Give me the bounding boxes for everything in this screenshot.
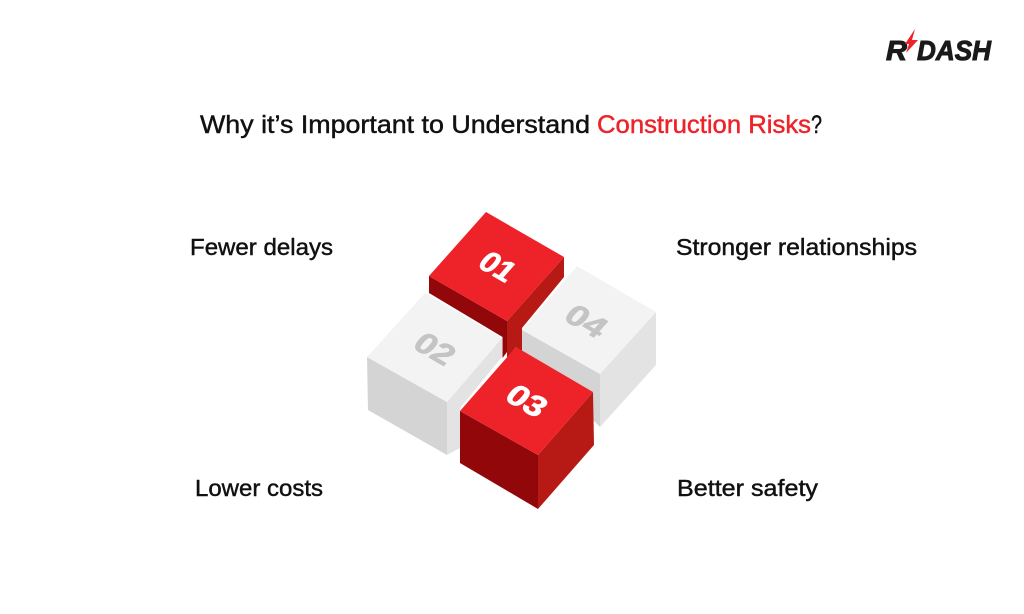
block 01: 01: [471, 245, 524, 288]
block 04: 04: [557, 298, 616, 345]
block 04: [522, 266, 656, 427]
label: Stronger relationships: Stronger relationships: [676, 234, 917, 260]
title: [200, 111, 822, 139]
block 02: 02: [406, 326, 463, 372]
title: ?: [811, 111, 822, 139]
label: Fewer delays: Fewer delays: [190, 234, 333, 260]
logo: RDASH: R: [886, 35, 908, 66]
block 03: 03: [498, 378, 555, 424]
title: Construction Risks: [597, 111, 811, 139]
block 01: [429, 212, 564, 358]
block 03: [460, 347, 594, 509]
label: Lower costs: Lower costs: [195, 475, 323, 501]
logo: RDASH: [886, 29, 992, 66]
logo: RDASH: DASH: [917, 35, 992, 66]
label: Better safety: Better safety: [677, 475, 819, 501]
block 02: [367, 293, 502, 455]
title: Why it’s Important to Understand: [200, 111, 590, 139]
